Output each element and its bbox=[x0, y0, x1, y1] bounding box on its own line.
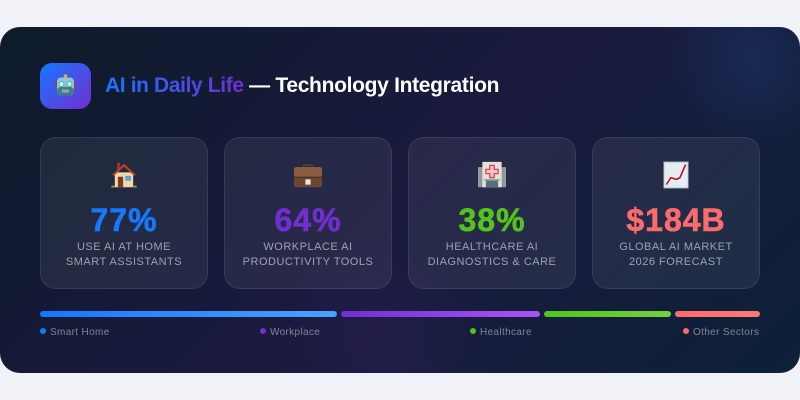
panel: workplace stat bbox=[224, 137, 392, 289]
panel: smart home stat bbox=[40, 137, 208, 289]
panel: market stat bbox=[592, 137, 760, 289]
legend: healthcare: Healthcare bbox=[480, 327, 532, 338]
icon: house bbox=[111, 162, 137, 188]
label: WORKPLACE AI bbox=[263, 241, 353, 253]
bar: other sectors segment bbox=[675, 311, 760, 317]
bar: healthcare segment bbox=[544, 311, 671, 317]
bar: smart home segment bbox=[40, 311, 337, 317]
label: HEALTHCARE AI bbox=[446, 241, 538, 253]
stat: 64%: 64% bbox=[274, 202, 342, 238]
label: DIAGNOSTICS & CARE bbox=[428, 256, 556, 268]
legend: other sectors: Other Sectors bbox=[693, 327, 759, 338]
icon: briefcase bbox=[294, 164, 322, 188]
label: GLOBAL AI MARKET bbox=[619, 241, 733, 253]
label: SMART ASSISTANTS bbox=[66, 256, 182, 268]
title: AI in Daily Life — Technology Integration bbox=[105, 74, 499, 97]
stat: 77%: 77% bbox=[90, 202, 158, 238]
label bbox=[428, 241, 556, 268]
icon: rising chart bbox=[663, 161, 689, 189]
label: PRODUCTIVITY TOOLS bbox=[243, 256, 373, 268]
legend: workplace: Workplace bbox=[270, 327, 320, 338]
label bbox=[619, 241, 733, 268]
panel: healthcare stat bbox=[408, 137, 576, 289]
label: USE AI AT HOME bbox=[77, 241, 171, 253]
stat: $184B: $184B bbox=[626, 202, 726, 238]
bar: workplace segment bbox=[341, 311, 540, 317]
label bbox=[66, 241, 182, 268]
icon: robot logo bbox=[40, 63, 91, 109]
label: 2026 FORECAST bbox=[629, 256, 723, 268]
legend: smart home: Smart Home bbox=[50, 327, 110, 338]
icon: hospital bbox=[478, 162, 506, 188]
label bbox=[243, 241, 373, 268]
stat: 38%: 38% bbox=[458, 202, 526, 238]
